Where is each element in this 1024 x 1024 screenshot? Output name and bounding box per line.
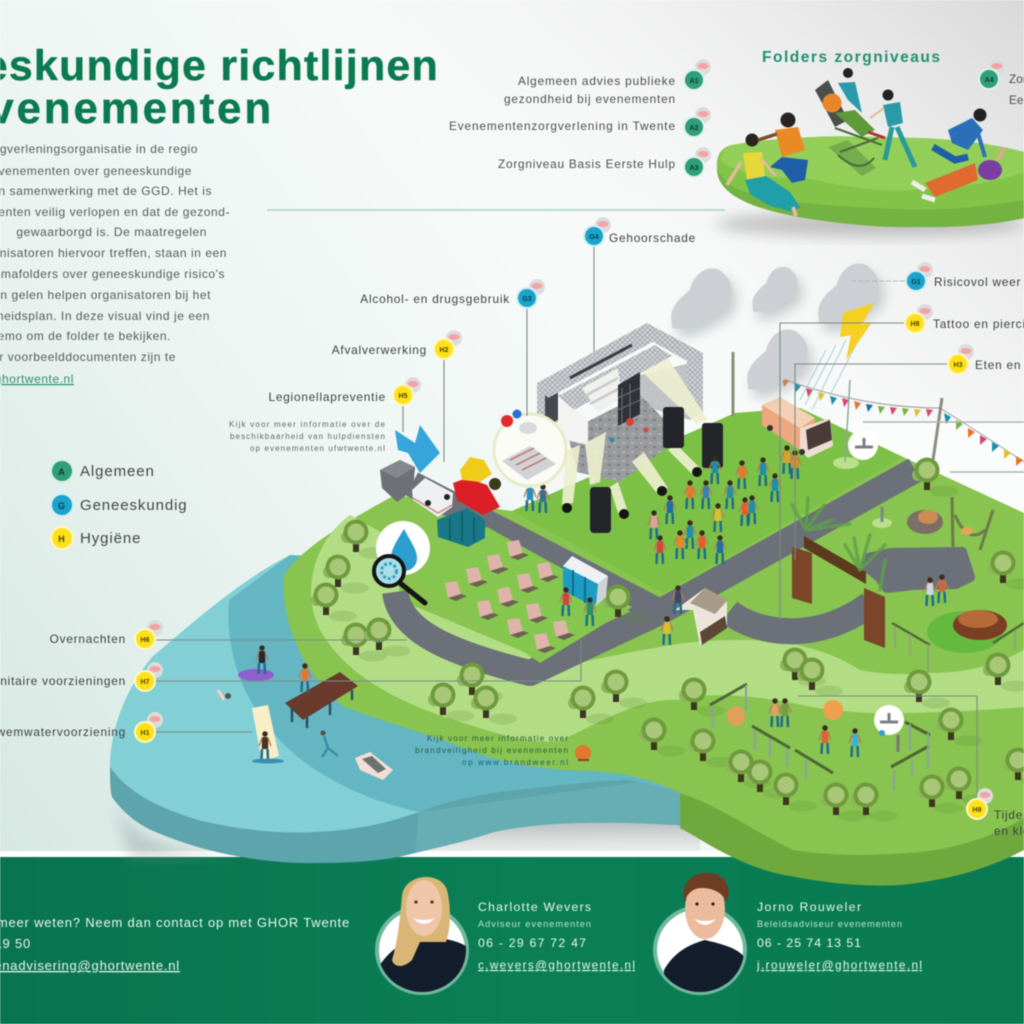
divider line	[267, 209, 725, 211]
info pavilion	[661, 585, 728, 645]
light grass band	[311, 515, 1024, 742]
callout A4	[979, 59, 1024, 107]
ambulance	[412, 478, 453, 517]
water side wall	[110, 765, 690, 863]
details: Jorno: j.rouweler@ghortwente.nl	[756, 959, 922, 972]
callout A3	[498, 147, 711, 177]
small pole	[872, 507, 892, 528]
road	[395, 470, 915, 673]
blue arrows	[395, 425, 440, 473]
contact: Charlotte Wevers	[377, 877, 635, 1000]
details: Charlotte: 06 - 29 67 72 47	[478, 936, 586, 950]
contact: Jorno Rouweler	[655, 873, 922, 1000]
details: Jorno	[756, 900, 922, 972]
callout H7 sanitair: H7	[141, 679, 150, 686]
jet ski	[238, 645, 274, 681]
note: hulpdiensten: op evenementen ufwtwente.nl	[250, 444, 385, 453]
campfire icon	[575, 745, 591, 761]
legend: Geneeskundig: Geneeskundig	[80, 497, 188, 514]
group: paramedic and patient	[912, 108, 1004, 200]
mini island shadow	[715, 211, 1024, 237]
note: brandweer: op www.brandweer.nl	[462, 758, 568, 767]
group: woman and helper	[727, 112, 808, 216]
screen	[560, 368, 640, 445]
cloud 3	[818, 263, 879, 324]
callout H8 tattoo	[905, 304, 1024, 333]
stage	[537, 323, 723, 533]
island shadow	[110, 790, 240, 858]
intro text block	[0, 142, 230, 386]
callout A3: A3	[690, 165, 699, 172]
spotlights	[562, 467, 702, 519]
picnic table	[953, 610, 1007, 640]
stage field	[512, 408, 903, 593]
lake activities	[218, 645, 393, 780]
callout A1	[504, 59, 711, 106]
callouts: map top	[0, 217, 1024, 838]
legend: Hygiene	[51, 527, 141, 549]
legend	[51, 460, 188, 549]
mini island light patch	[720, 136, 1024, 190]
note: hulpdiensten: beschikbaarheid van hulpdiensten	[230, 432, 385, 441]
fire truck	[453, 478, 500, 515]
fences	[892, 623, 1024, 645]
callout A2	[449, 107, 711, 137]
callout H2 afval: H2	[440, 347, 449, 354]
cloud 4	[747, 329, 808, 390]
callout H2 afval	[332, 330, 462, 359]
truss legs	[537, 353, 703, 430]
note: brandweer	[415, 734, 568, 767]
callout H3 eten	[948, 344, 1024, 374]
callout H7 sanitair	[0, 662, 163, 691]
callout G4 gehoorschade: Gehoorschade	[609, 231, 696, 245]
details: Jorno: Jorno Rouweler	[757, 900, 861, 914]
callout A2: A2	[690, 125, 699, 132]
panel: festival island	[110, 323, 1024, 886]
couple on plaza	[924, 577, 936, 606]
details: Charlotte: Adviseur evenementen	[478, 919, 591, 929]
callout H6 overnachten: H6	[141, 637, 150, 644]
light beams	[562, 358, 708, 513]
bunting	[733, 352, 1024, 466]
portrait: Charlotte	[377, 877, 470, 1000]
callout G1 risicovol weer	[906, 262, 1021, 291]
callouts: folders	[449, 59, 1024, 177]
magnified inset: stage plan	[494, 410, 566, 486]
note: hulpdiensten	[229, 420, 386, 453]
callout G3 alcohol: Alcohol- en drugsgebruik	[360, 292, 510, 306]
details: Charlotte	[478, 900, 635, 972]
heading: folders zorgniveaus: Folders zorgniveaus	[762, 49, 940, 66]
note: brandweer: brandveiligheid bij evenementen	[415, 746, 568, 755]
back wall	[640, 360, 703, 420]
rain lines	[800, 340, 856, 410]
hammock poles	[952, 497, 993, 550]
land side wall	[680, 790, 1024, 886]
callout H5 legionella: Legionellapreventie	[268, 390, 386, 404]
swimmer near jet ski	[218, 690, 231, 700]
callout H1 zwemwater	[0, 712, 163, 742]
callout A1: A1	[690, 78, 699, 85]
callout A3: Zorgniveau Basis Eerste Hulp	[498, 157, 675, 171]
emergency vehicles and building	[380, 425, 501, 547]
portrait: Jorno	[655, 873, 745, 1000]
stage deck	[567, 395, 668, 482]
callout H6 overnachten	[50, 620, 163, 649]
footer band	[0, 851, 1024, 1024]
callout A1: gezondheid bij evenementen	[504, 92, 675, 106]
climbing frames	[710, 684, 930, 773]
callout A4: A4	[985, 77, 994, 84]
entrance arch	[792, 498, 885, 648]
legend: Algemeen	[51, 460, 155, 482]
picnic patch	[927, 611, 1003, 653]
details: Charlotte: Charlotte Wevers	[478, 900, 591, 914]
callout H6 overnachten: Overnachten	[50, 632, 126, 646]
legend: Geneeskundig: G	[58, 501, 66, 511]
callout H3 eten: H3	[954, 362, 963, 369]
callout H9 tijdelijke	[967, 788, 1024, 838]
windsurfer	[252, 705, 284, 764]
trees	[311, 458, 1024, 822]
callout G1 risicovol weer: Risicovol weer	[934, 275, 1021, 289]
plaza	[866, 552, 970, 588]
details: Jorno: Beleidsadviseur evenementen	[757, 919, 902, 929]
water deep band	[228, 555, 700, 812]
fire ring	[907, 510, 943, 534]
callout G3 alcohol	[360, 279, 545, 308]
leader lines	[156, 247, 1024, 797]
bunting poles	[733, 352, 942, 460]
note: brandweer: Kijk voor meer informatie over	[427, 734, 568, 743]
callout G4 gehoorschade: G4	[589, 234, 599, 241]
palm leaves	[792, 498, 885, 590]
tents	[445, 540, 575, 653]
magnified inset: water test	[374, 521, 430, 603]
title	[0, 42, 439, 133]
speakers	[590, 407, 723, 533]
medical tent blue	[437, 508, 485, 547]
truss roof	[537, 323, 703, 410]
callout G4 gehoorschade	[584, 217, 696, 246]
details: Jorno: 06 - 25 74 13 51	[757, 936, 861, 950]
callout H2 afval: Afvalverwerking	[332, 343, 427, 357]
stage performers	[610, 418, 648, 442]
callout G1 risicovol weer: G1	[911, 279, 921, 286]
footer contact text	[0, 915, 350, 973]
callout H9 tijdelijke: H9	[973, 807, 982, 814]
boat	[355, 752, 393, 780]
water surface	[110, 555, 700, 832]
clouds	[671, 263, 879, 390]
water tap inset forest	[874, 705, 904, 752]
cloud 2	[752, 267, 798, 312]
group: stretcher team	[815, 68, 915, 176]
shadow under lake	[380, 815, 700, 851]
crowd	[524, 445, 801, 564]
legend: Algemeen: Algemeen	[80, 463, 155, 480]
portable toilets	[560, 556, 608, 626]
callout H5 legionella	[268, 377, 421, 405]
callout A2: Evenementenzorgverlening in Twente	[449, 119, 675, 133]
callout H8 tattoo: H8	[911, 321, 920, 328]
mini island top	[717, 136, 1024, 210]
legend: Hygiene: Hygiëne	[80, 530, 141, 547]
lightning bolt	[840, 303, 874, 360]
callout A1: Algemeen advies publieke	[518, 74, 675, 88]
callout H1 zwemwater: H1	[141, 730, 150, 737]
legend: Hygiene: H	[58, 534, 66, 544]
cloud 1	[671, 268, 732, 329]
stretcher frame	[828, 128, 882, 176]
callout H5 legionella: H5	[399, 393, 408, 400]
camping field	[415, 527, 632, 663]
panel: care levels mini island	[715, 68, 1024, 237]
hammock and playground	[872, 497, 1024, 672]
callout G3 alcohol: G3	[522, 296, 532, 303]
jetty	[285, 663, 358, 728]
forest play area	[710, 684, 930, 790]
intro text block: gewaarborgd is. De maatregelen	[16, 225, 207, 239]
legend: Algemeen: A	[58, 467, 66, 477]
land base	[284, 408, 1024, 855]
note: hulpdiensten: Kijk voor meer informatie over de	[229, 420, 386, 429]
food truck	[762, 397, 833, 458]
mini island side	[717, 160, 1024, 227]
details: Charlotte: c.wevers@ghortwente.nl	[478, 959, 635, 972]
legend: Geneeskundig	[51, 494, 188, 516]
water tap inset	[833, 380, 878, 469]
grey building	[380, 460, 415, 502]
children and play equipment	[779, 698, 791, 727]
swimmer	[320, 730, 338, 757]
